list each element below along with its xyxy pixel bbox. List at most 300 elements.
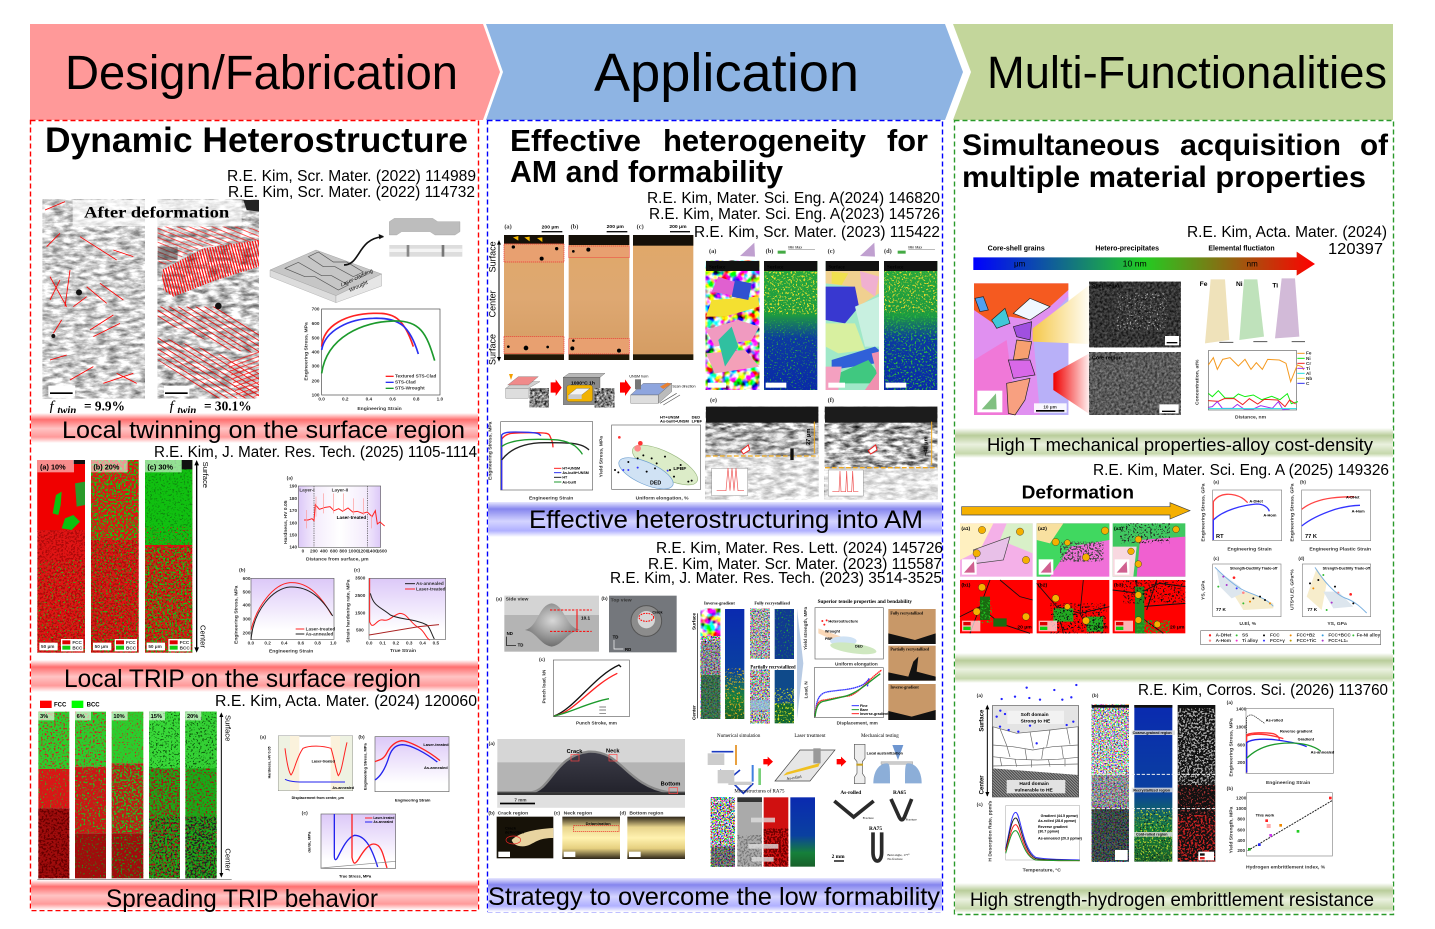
chart: hydrogen desorption: (c) <box>977 802 983 808</box>
phase map: 10%: 10% <box>113 714 125 720</box>
micrographs: bend specimens <box>888 609 936 720</box>
chart: UTS-El trade-off: YS, GPa <box>1327 621 1347 627</box>
chart: hardness gradient <box>260 735 354 800</box>
maps: IPF row: (a2) <box>1038 526 1047 532</box>
schematic: simulation, laser treatment, mechanical testing: Laser treatment <box>794 734 826 739</box>
chart: tensile AM: HT+UNSM <box>562 467 580 471</box>
chart: hardness profile: 800 <box>339 548 348 553</box>
arrow: surface to center <box>37 712 233 879</box>
chart: yield strength vs elongation <box>803 599 912 667</box>
references: additive manufacturing papers: R.E. Kim, Mater. Sci. Eng. A(2024) 146820 <box>647 190 940 207</box>
micrograph: optical images a, b, c: (b) <box>571 224 578 231</box>
map: KAM d <box>884 245 937 390</box>
chart: tensile curves laser treated: (b) <box>239 568 246 574</box>
chart: yield stress scatter: Uniform elongation, % <box>636 495 689 501</box>
band: Effective heterostructuring into AM: Effective heterostructuring into AM <box>529 506 923 534</box>
arrow: surface to center: Center <box>224 848 233 872</box>
chart: tensile curves laser treated: 200 <box>243 630 251 635</box>
phase map: 30% strain: 50 μm <box>148 644 162 649</box>
legend: alloy systems <box>1201 631 1381 645</box>
chart: hydrogen desorption <box>977 801 1083 873</box>
legend: FCC BCC: BCC <box>87 703 100 709</box>
chart: hardness profile: 0 <box>302 548 305 553</box>
header arrow: Design/Fabrication <box>30 24 500 120</box>
chart: tensile curves laser treated: 300 <box>243 617 251 622</box>
chart: strain hardening rate: 0.5 <box>433 640 440 645</box>
micrograph: neck region: (c) <box>554 810 560 816</box>
references: additive manufacturing papers <box>647 190 940 241</box>
micrograph: TEM e: 27 μm <box>806 429 812 445</box>
chart: tensile curves spreading: Engineering Stress, MPa <box>363 742 368 790</box>
chart: RT tensile: (a) <box>1213 479 1219 484</box>
micrograph: optical images a, b, c: (a) <box>504 224 512 231</box>
chart: tensile curves laser treated: 0.6 <box>298 640 305 645</box>
maps: inverse gradient specimen: Center <box>692 705 697 720</box>
references: Mater. Sci. Eng. A 149326: R.E. Kim, Mater. Sci. Eng. A (2025) 149326 <box>1093 462 1389 479</box>
chart: tensile curves laser treated: Engineering Strain <box>269 649 313 655</box>
chart: yield strength vs elongation: Wrought <box>825 630 841 634</box>
micrographs: bend specimens: Inverse-gradient <box>890 685 919 690</box>
chart: tensile curves laser treated: Engineering Stress, MPa <box>233 585 239 644</box>
micrograph: optical images a, b, c <box>488 224 693 365</box>
chart: engineering stress versus strain: 0.4 <box>366 397 373 402</box>
arrow: deformation direction <box>962 503 1190 519</box>
map: KAM d: (d) <box>884 248 892 255</box>
map: KAM gradient: Cold-rolled region <box>1136 833 1167 837</box>
chart: hardness gradient: As-annealed <box>332 786 354 790</box>
micrographs: bend specimens: Partially recrystallized <box>890 646 930 651</box>
chart: engineering stress hydrogen: 1000 <box>1236 724 1247 729</box>
chart: load vs displacement: Bare <box>860 708 868 712</box>
maps: inverse gradient specimen <box>692 600 744 720</box>
micrograph: TEM f: ~40 μm <box>924 436 930 456</box>
micrograph: TEM f: (f) <box>828 397 834 404</box>
photo: side view of cup: (a) <box>496 597 502 603</box>
micrograph: shell region: Shell region <box>1092 284 1122 290</box>
map: EBSD IPF a: Surface <box>709 265 726 270</box>
chart: strain hardening spreading: Laser-treated <box>373 816 394 820</box>
chart: strain hardening spreading: True Stress, MPa <box>339 874 372 879</box>
chart: UTS-El trade-off: 77 K <box>1307 607 1318 612</box>
legend: alloy systems: FCC+L1₂ <box>1328 638 1348 643</box>
schematic: bent specimens as-rolled, RA65, RA75: RA75 <box>869 826 882 832</box>
chart: tensile AM: Engineering Stress, MPa <box>488 421 494 480</box>
arrow: surface to center: Center <box>199 625 208 648</box>
chart: hardness profile: Laser-treated <box>337 515 366 520</box>
chart: engineering stress versus strain: 0.6 <box>389 397 396 402</box>
micrograph: core region <box>1089 352 1181 415</box>
photo: top view of cup: TD <box>613 634 618 639</box>
map: KAM d: Min Max <box>908 245 922 249</box>
maps: phase row: 20 μm <box>1017 625 1032 631</box>
references: additive manufacturing papers: R.E. Kim, Scr. Mater. (2023) 115422 <box>694 224 940 241</box>
legend: alloy systems: Fe-Ni alloy <box>1357 633 1381 638</box>
chart: engineering stress versus strain: Engineering Strain <box>357 406 402 412</box>
chart: strain hardening rate: Strain hardening rate, MPa <box>345 579 351 643</box>
label: f twin values: twin <box>177 406 196 417</box>
schematic: simulation, laser treatment, mechanical testing: As-rolled <box>786 774 802 781</box>
chart: tensile curves laser treated: 0.2 <box>264 640 271 645</box>
chart: 77 K tensile: Engineering Stress, GPa <box>1289 483 1295 542</box>
band: Effective heterostructuring into AM <box>488 502 942 537</box>
map: KAM b <box>764 245 817 390</box>
maps: fully and partially recrystallized <box>750 600 803 723</box>
legend: alloy systems: A-Hom <box>1216 638 1231 643</box>
chart: hydrogen desorption: H Desorption Rate, ppm/s <box>987 801 993 862</box>
micrograph: optical images a, b, c: Surface <box>488 334 498 365</box>
chart: hardness profile: 200 <box>310 548 318 553</box>
schematic: bent specimens as-rolled, RA65, RA75: RA65 <box>893 790 906 796</box>
band: Spreading TRIP behavior: Spreading TRIP behavior <box>106 885 378 913</box>
chart: hardness profile: 400 <box>320 548 328 553</box>
schematic: bent specimens as-rolled, RA65, RA75: No fracture <box>887 857 903 861</box>
schematic: simulation, laser treatment, mechanical testing <box>708 734 922 793</box>
arrow: length scale gradient: nm <box>1247 260 1258 269</box>
phase map: 15% <box>149 712 180 878</box>
chart: hardness profile: 180 <box>289 496 298 501</box>
chart: tensile curves laser treated <box>233 568 337 655</box>
chart: 77 K tensile: Engineering Plastic Strain <box>1309 547 1371 553</box>
heading: Effective heterogeneity for AM and formability: for <box>887 123 928 158</box>
chart: engineering stress versus strain: STS-Clad <box>395 380 416 385</box>
chart: engineering stress versus strain: 700 <box>312 307 320 312</box>
micrograph: bottom region: (d) <box>620 810 626 816</box>
chart: 77 K tensile: A-Hom <box>1352 508 1365 513</box>
chart: yield strength vs hydrogen embrittlement index: This work <box>1256 813 1275 818</box>
schematic: simulation, laser treatment, mechanical testing: Numerical simulation <box>717 734 761 739</box>
chart: tensile AM <box>488 421 593 501</box>
chart: strain hardening rate: 2500 <box>355 593 366 598</box>
references: additive manufacturing papers: R.E. Kim, Mater. Sci. Eng. A(2023) 145726 <box>649 206 940 223</box>
maps: phase row: (b2) <box>1038 583 1047 589</box>
chart: yield strength vs elongation: Superior tensile properties and bendability <box>818 599 912 605</box>
schematic: process flow printing, annealing, UNSM: UNSM horn <box>629 374 648 378</box>
phase map: 15%: 15% <box>151 714 162 720</box>
map: EBSD IPF c <box>826 243 879 390</box>
schematic: gradient grains and hydrogen: (a) <box>977 693 983 699</box>
heading: Effective heterogeneity for AM and formability: Effective <box>510 123 641 158</box>
chart: load vs displacement: Load, N <box>804 681 809 698</box>
chart: hydrogen desorption: As-rolled (28.6 ppmw) <box>1038 819 1077 823</box>
legend: alloy systems: FCC+TiC <box>1297 638 1317 643</box>
chart: 77 K tensile: A-DHet <box>1346 494 1360 499</box>
micrograph: neck region: Delamination <box>586 821 611 826</box>
references: twinning papers: R.E. Kim, Scr. Mater. (2022) 114732 <box>228 184 475 201</box>
maps: phase row: (b3) <box>1114 583 1123 589</box>
chart: tensile curves laser treated: 0.4 <box>281 640 288 645</box>
chart: tensile AM: As-built+UNSM <box>562 471 589 475</box>
references: Acta Mater: R.E. Kim, Acta. Mater. (2024) <box>1187 224 1387 241</box>
chart: engineering stress hydrogen: Gradient <box>1298 736 1315 741</box>
map: KAM gradient <box>1132 705 1175 862</box>
chart: strain hardening rate: True Strain <box>390 648 416 654</box>
chart: concentration profile: Distance, nm <box>1235 414 1267 420</box>
panel: dynamic heterostructure <box>30 120 478 913</box>
label: f twin values: f <box>49 398 56 415</box>
phase maps and charts: local TRIP <box>37 460 446 655</box>
chart: concentration profile: Ti <box>1306 366 1310 371</box>
chart: tensile curves spreading <box>358 735 449 802</box>
schematic: process flow printing, annealing, UNSM: 1000°C 1h <box>571 380 595 386</box>
chart: RT tensile: A-Hom <box>1263 513 1277 518</box>
chart: yield strength vs elongation: Uniform elongation <box>835 662 878 667</box>
photo: top view of cup: RD <box>625 647 631 652</box>
chart: yield strength trade-off <box>1201 556 1281 627</box>
band: High T mechanical properties: High T mechanical properties-alloy cost-density <box>987 434 1374 455</box>
schematic: process flow printing, annealing, UNSM <box>506 373 696 407</box>
heading: Deformation: Deformation <box>1022 481 1134 502</box>
chart: yield strength vs elongation: Heterostructure <box>828 619 859 624</box>
heading: Simultaneous acquisition of multiple material properties: acquisition <box>1180 129 1341 162</box>
chart: 77 K tensile <box>1289 479 1371 553</box>
chart: engineering stress versus strain: 600 <box>312 321 320 326</box>
chart: hardness profile: Hardness, HV 0.05 <box>283 500 289 544</box>
atom probe maps: Fe Ni Ti: Ni <box>1236 281 1243 288</box>
chart: strain hardening rate: Laser-treated <box>416 586 446 591</box>
schematic: bent specimens as-rolled, RA65, RA75: Fracture <box>863 816 874 820</box>
figures: deformation maps and charts <box>960 479 1381 645</box>
figures: hydrogen embrittlement <box>977 684 1335 873</box>
chart: concentration profile: Ni <box>1306 356 1311 361</box>
arrow: length scale gradient: Core-shell grains <box>988 245 1045 252</box>
header arrow: Application <box>486 24 963 120</box>
chart: load vs displacement <box>804 668 889 725</box>
chart: strain hardening rate: As-annealed <box>416 581 444 586</box>
chart: hardness profile: 1200 <box>358 548 369 553</box>
chart: tensile curves laser treated: 400 <box>243 603 251 608</box>
arrow: surface to center: Surface <box>224 715 233 741</box>
maps: inverse gradient specimen: Surface <box>692 613 697 630</box>
arrow: length scale gradient: Hetero-precipitates <box>1095 245 1159 252</box>
chart: strain hardening rate: 1500 <box>355 610 366 615</box>
chart: hardness profile: 190 <box>289 483 298 488</box>
chart: strain hardening rate: 0.1 <box>379 640 386 645</box>
band: High T mechanical properties <box>955 428 1393 458</box>
chart: punch load: Punch load, kN <box>542 669 547 703</box>
panel: effective heterogeneity <box>488 120 943 912</box>
chart: engineering stress versus strain: 300 <box>312 364 320 369</box>
chart: yield stress scatter: LPBF <box>673 466 686 472</box>
chart: concentration profile: Nb <box>1306 376 1312 381</box>
chart: punch load: (c) <box>539 657 545 663</box>
photo: top view of cup: (b) <box>601 596 608 602</box>
schematic: simulation, laser treatment, mechanical testing: Local austenitization <box>867 751 903 755</box>
chart: yield strength vs hydrogen embrittlement index: 1200 <box>1236 795 1247 800</box>
phase map: 20%: 20% <box>187 714 198 720</box>
chart: UTS-El trade-off: UTS*U.El, GPa*% <box>1289 569 1295 610</box>
micrograph: crack region: deflection <box>505 830 524 835</box>
chart: yield stress scatter: Yield Stress, MPa <box>598 436 604 477</box>
arrow: surface to center <box>194 460 210 653</box>
schematic: laser-cladded plate with dog-bone specimens: Wrought <box>348 280 370 294</box>
label: f twin values: f <box>169 398 176 415</box>
chart: concentration profile: Al <box>1306 371 1311 376</box>
photo: side view of cup: ND <box>507 631 513 636</box>
micrograph: after deformation 30.1% <box>158 200 259 398</box>
map: EBSD IPF c: Surface <box>828 265 845 270</box>
arrow: length scale gradient: μm <box>1014 260 1026 269</box>
band: Local twinning on the surface region: Local twinning on the surface region <box>62 417 465 444</box>
schematic: gradient grains and hydrogen: Hard domain <box>1019 781 1049 787</box>
phase map: 3% <box>38 712 69 878</box>
chart: yield strength vs hydrogen embrittlement index: (b) <box>1227 786 1233 792</box>
chart: hardness profile: Layer-II <box>332 487 348 492</box>
map: core-shell IPF: 10 μm <box>1043 405 1057 410</box>
chart: RT tensile <box>1201 479 1282 553</box>
micrograph: optical images a, b, c: Surface <box>488 241 498 272</box>
chart: hardness profile: 140 <box>289 545 298 550</box>
phase map: 20% strain: (b) 20% <box>93 462 120 471</box>
chart: hardness profile: 600 <box>330 548 338 553</box>
maps: IPF row <box>960 523 1185 577</box>
chart: strain hardening rate: 500 <box>356 628 364 633</box>
chart: yield strength trade-off: (c) <box>1213 556 1219 561</box>
chart: hardness profile: Layer-I <box>299 487 315 492</box>
chart: RT tensile: Engineering Strain <box>1227 547 1272 553</box>
chart: engineering stress versus strain: 0.8 <box>413 397 420 402</box>
chart: tensile AM: As-built <box>562 480 577 484</box>
references: Corros. Sci.: R.E. Kim, Corros. Sci. (2026) 113760 <box>1138 682 1388 699</box>
chart: tensile curves spreading: (b) <box>358 735 365 741</box>
atom probe maps: Fe Ni Ti: Fe <box>1200 281 1208 288</box>
chart: engineering stress hydrogen: Reverse gradient <box>1280 729 1313 734</box>
chart: hardness gradient: Hardness, HV 0.05 <box>268 746 272 778</box>
caption banner: After deformation <box>73 200 242 226</box>
heading: Dynamic Heterostructure: Dynamic Heterostructure <box>45 121 468 160</box>
chart: concentration profile: C <box>1306 381 1310 386</box>
phase map: 20% strain: 50 μm <box>95 644 108 649</box>
maps: fully and partially recrystallized: Partially recrystallized <box>750 665 796 670</box>
chart: load vs displacement: Inverse-gradient <box>860 712 889 716</box>
chart: yield strength vs elongation: PBF <box>825 637 833 641</box>
chart: yield strength vs elongation: DED <box>855 644 863 648</box>
chart: punch load: Punch Stroke, mm <box>576 720 617 725</box>
schematic: gradient grains and hydrogen: Soft domain <box>1021 712 1049 718</box>
chart: tensile curves spreading: Engineering Strain <box>395 797 431 802</box>
chart: engineering stress versus strain: Textured STS-Clad <box>395 374 436 379</box>
chart: hardness profile: 160 <box>289 520 298 525</box>
chart: yield stress scatter: HT+UNSM <box>660 414 680 419</box>
map: KAM gradient: Coarse-grained region <box>1133 731 1172 735</box>
micrograph: TEM e: (e) <box>710 397 717 404</box>
chart: hydrogen desorption: As-annealed (20.3 ppmw) <box>1038 836 1083 840</box>
legend: alloy systems: FCC+BCC <box>1328 633 1351 638</box>
micrographs and tensile chart: local twinning <box>43 200 462 417</box>
micrograph: optical images a, b, c: 200 μm <box>669 224 687 230</box>
photo: bent specimen with crack, neck, bottom <box>489 739 685 808</box>
photo: side view of cup: Side view <box>506 597 529 603</box>
chart: engineering stress hydrogen: Engineering Stress, MPa <box>1229 718 1235 777</box>
chart: yield strength trade-off: U.El, % <box>1239 621 1257 627</box>
chart: RT tensile: Engineering Stress, GPa <box>1201 483 1207 542</box>
chart: 77 K tensile: 77 K <box>1305 534 1318 540</box>
chart: engineering stress hydrogen: As-rolled <box>1266 718 1283 723</box>
chart: load vs displacement: Fine <box>860 704 868 708</box>
caption banner: After deformation: After deformation <box>84 204 229 221</box>
chart: hardness profile: (a) <box>287 475 293 481</box>
phase map: 6%: 6% <box>77 714 85 720</box>
heading: Effective heterogeneity for AM and formability: AM and formability <box>510 154 784 189</box>
references: formability papers: R.E. Kim, Mater. Scr. Mater. (2023) 115587 <box>648 556 942 573</box>
photo: side view of cup <box>496 596 599 652</box>
chart: hydrogen desorption: Gradient (44.5 ppmw) <box>1041 814 1079 818</box>
band: Local TRIP on the surface region <box>31 660 478 693</box>
chart: tensile curves laser treated: Laser-treated <box>306 626 335 631</box>
chart: engineering stress versus strain: 400 <box>312 349 320 354</box>
chart: engineering stress versus strain <box>303 307 444 412</box>
chart: yield strength trade-off: Strength-Ductility Trade-off <box>1230 566 1278 570</box>
heading: Simultaneous acquisition of multiple material properties: Simultaneous <box>962 129 1160 162</box>
chart: strain hardening spreading: (c) <box>302 811 308 817</box>
chart: hardness gradient: (a) <box>260 735 266 741</box>
maps: inverse gradient specimen: Inverse-gradient <box>704 600 735 605</box>
micrograph: optical images a, b, c: 200 μm <box>607 224 624 230</box>
chart: yield strength vs hydrogen embrittlement index: Hydrogen embrittlement index, % <box>1246 865 1326 871</box>
map: EBSD IPF gradient: (b) <box>1092 693 1099 699</box>
chart: hydrogen desorption: Reverse gradient <box>1038 825 1068 829</box>
phase map: 10% strain: BCC <box>72 645 83 650</box>
phase map: 3%: 3% <box>40 714 48 720</box>
micrograph: crack region: (b) <box>488 810 495 816</box>
chart: yield stress scatter: DED <box>650 481 661 487</box>
schematic: gradient grains and hydrogen: vulnerable to HE <box>1015 787 1054 793</box>
micrograph: crack region <box>488 810 553 858</box>
phase maps and charts: spreading TRIP <box>37 701 449 879</box>
callout fans: shell and core zoom <box>1033 285 1089 414</box>
arrow: length scale gradient <box>973 245 1315 276</box>
heading: Simultaneous acquisition of multiple material properties <box>962 129 1389 194</box>
schematic: laser-cladded plate with dog-bone specimens <box>270 218 462 303</box>
chart: engineering stress versus strain: 100 <box>312 393 320 398</box>
chart: hardness gradient: Laser-treated <box>312 760 335 764</box>
band: High strength-hydrogen embrittlement resistance <box>955 883 1393 913</box>
legend: alloy systems: FCC+γ <box>1270 638 1285 643</box>
chart: engineering stress hydrogen: 200 <box>1237 760 1246 765</box>
schematic: gradient grains and hydrogen <box>977 684 1078 797</box>
chart: RT tensile: RT <box>1216 534 1224 540</box>
chart: yield strength vs hydrogen embrittlement index: 1000 <box>1236 806 1247 811</box>
schematic: bent specimens as-rolled, RA65, RA75: Fracture <box>906 817 917 821</box>
chart: hardness profile: 150 <box>289 533 298 538</box>
photo: top view of cup: Crack <box>652 610 663 614</box>
legend: alloy systems: A-DHet <box>1216 633 1232 638</box>
chart: 77 K tensile: (b) <box>1300 479 1306 484</box>
chart: tensile curves laser treated: 1.0 <box>330 640 337 645</box>
micrograph: optical images a, b, c: 200 μm <box>542 224 559 230</box>
chart: engineering stress hydrogen: (a) <box>1227 700 1233 706</box>
chart: yield strength trade-off: 77 K <box>1216 607 1226 612</box>
maps: phase row: (b1) <box>961 583 971 589</box>
chart: yield strength vs hydrogen embrittlement index: 200 <box>1237 848 1246 853</box>
chart: strain hardening rate: 0.2 <box>393 640 400 645</box>
figures: formability <box>488 596 936 867</box>
heading: Effective heterogeneity for AM and formability: heterogeneity <box>663 123 867 158</box>
chart: engineering stress versus strain: 0.0 <box>318 397 325 402</box>
photo: bent specimen with crack, neck, bottom: 7 mm <box>514 798 527 803</box>
chart: load vs displacement: Displacement, mm <box>837 720 878 725</box>
micrograph: after deformation 9.9% <box>43 200 145 398</box>
schematic: bent specimens as-rolled, RA65, RA75: Bent angle, 177° <box>887 853 910 858</box>
chart: tensile curves laser treated: As-annealed <box>306 632 334 637</box>
phase map: 10% strain: FCC <box>72 640 83 645</box>
chart: tensile curves spreading: As-annealed <box>424 765 448 770</box>
chart: strain hardening rate: 0.4 <box>419 640 426 645</box>
chart: engineering stress versus strain: STS-Wrought <box>395 386 425 391</box>
photo: side view of cup: 10.1 <box>581 616 590 621</box>
chart: engineering stress versus strain: 200 <box>312 378 320 383</box>
figures: heterostructuring into AM <box>488 224 937 501</box>
chart: concentration profile: Fe <box>1306 351 1312 356</box>
